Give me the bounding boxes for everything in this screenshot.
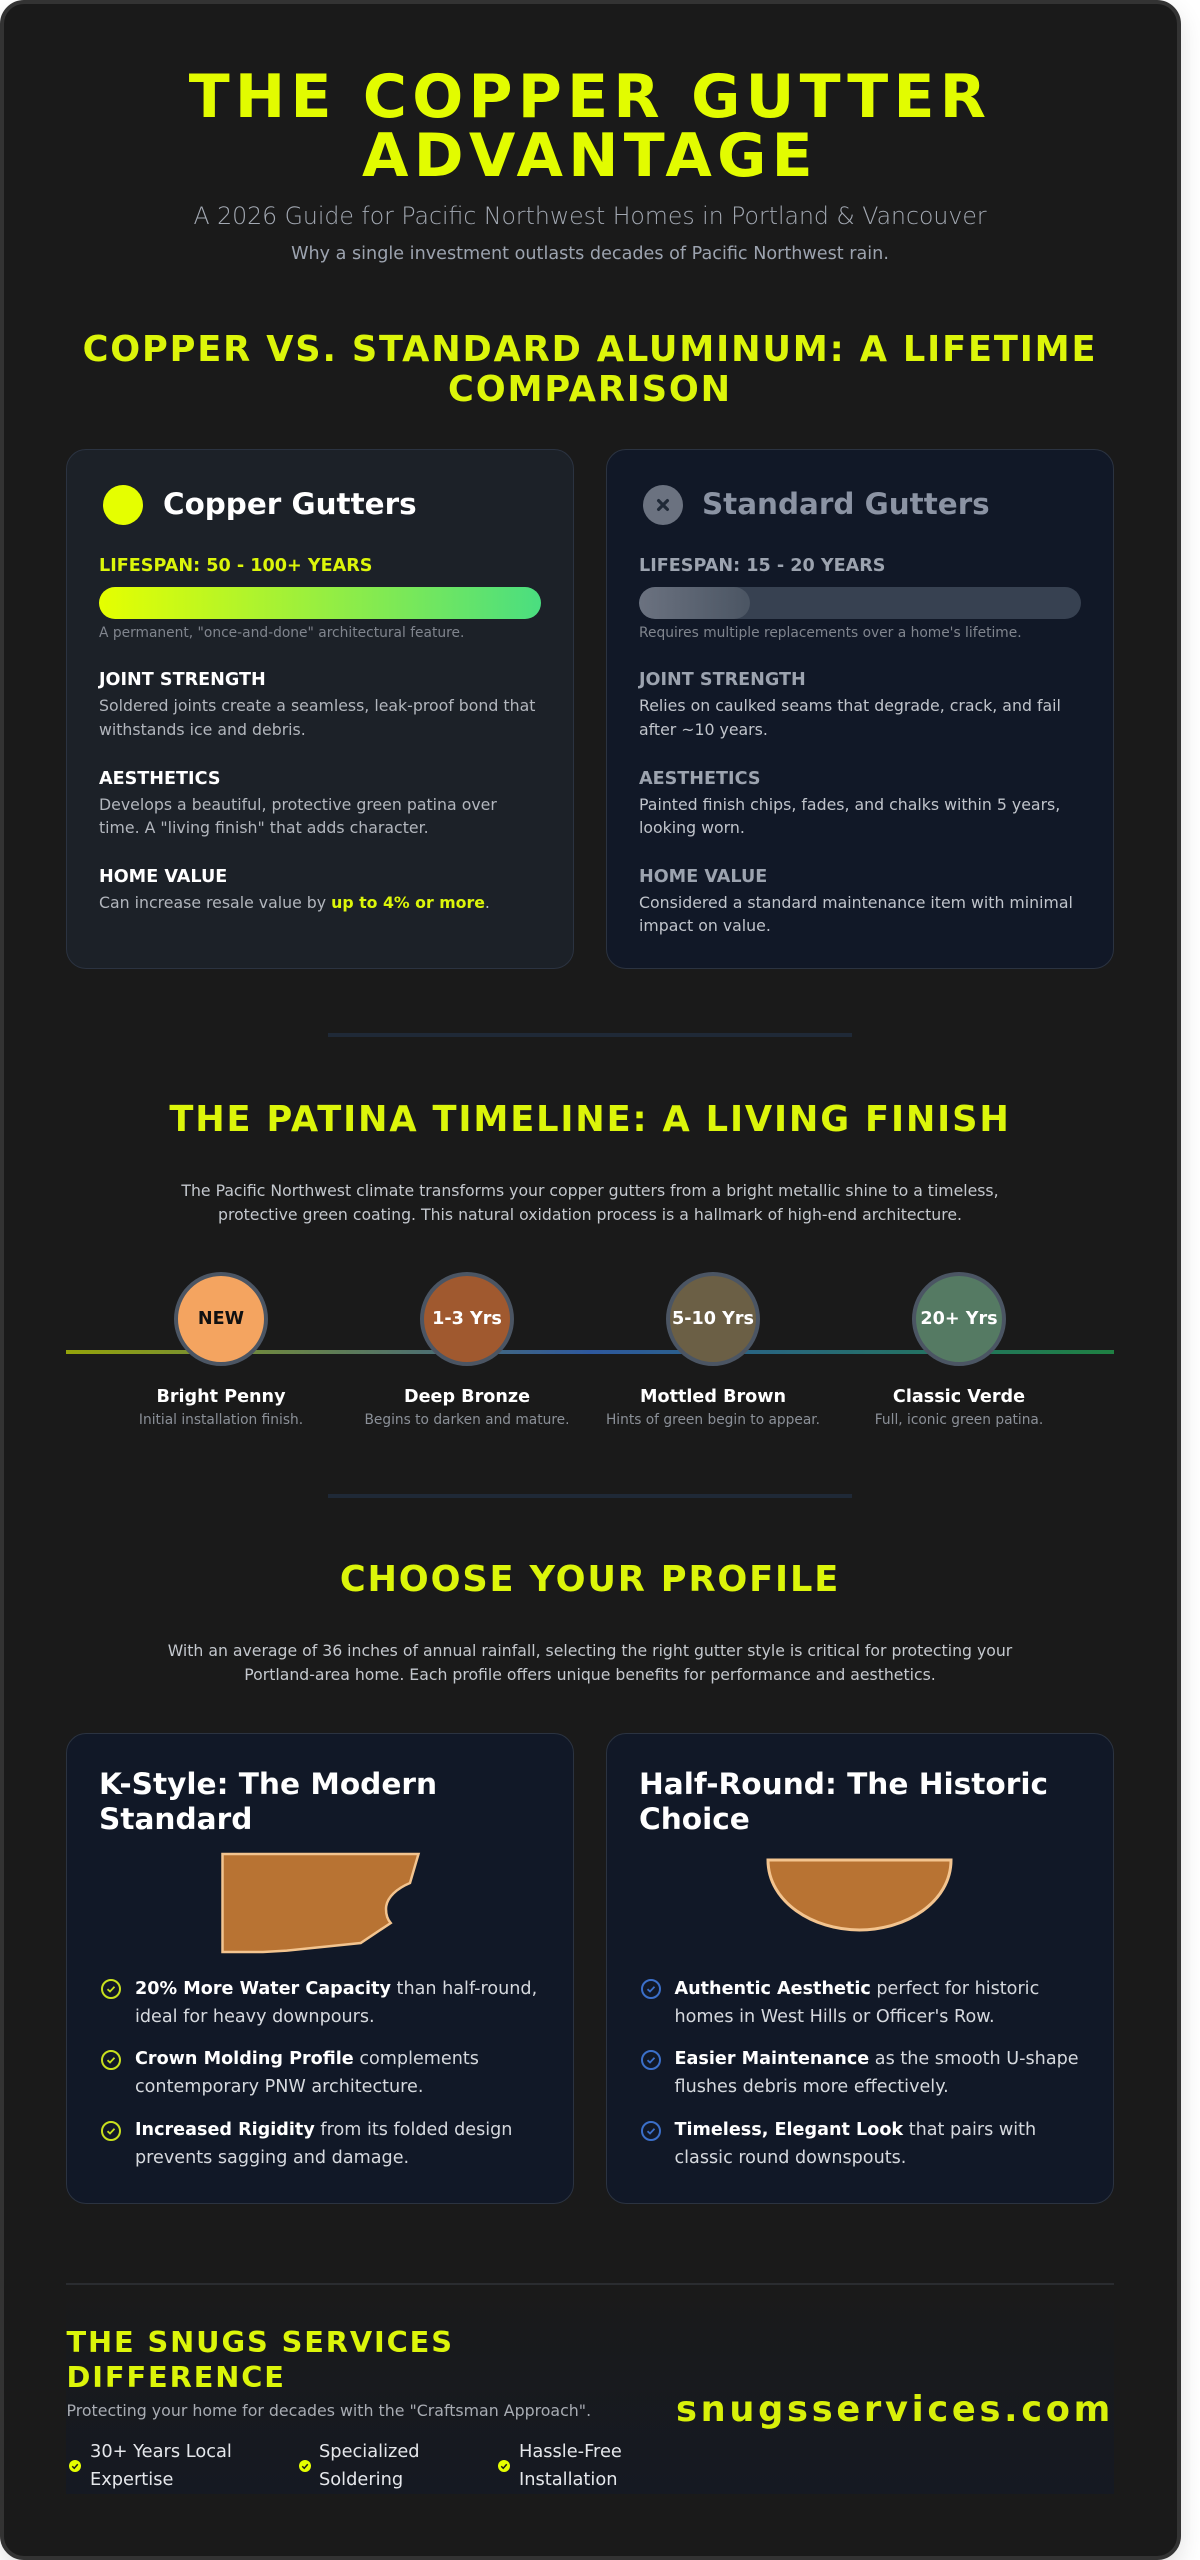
stage label: deep bronze: Deep Bronze: [404, 1387, 530, 1407]
feature: aesthetics: Painted finish chips, fades, and chalks within 5 years,: [639, 794, 1060, 814]
feature: home value: HOME VALUE: [639, 866, 767, 886]
patina intro text: protective green coating. This natural oxidation process is a hallmark of high-end architecture.: [218, 1205, 962, 1224]
benefit text: homes in West Hills or Officer's Row.: [674, 2007, 995, 2027]
benefit text: classic round downspouts.: [674, 2148, 906, 2168]
feature: expertise: [66, 2438, 266, 2494]
stage label: bright penny: [139, 1387, 303, 1428]
card heading: [639, 1767, 1048, 1836]
feature: soldering: [296, 2438, 466, 2494]
benefit: crown molding: [101, 2049, 479, 2097]
benefit text: flushes debris more effectively.: [674, 2077, 949, 2097]
benefit: water capacity: [101, 1978, 537, 2027]
footer website: snugsservices.com: [676, 2389, 1114, 2430]
feature: aesthetics: AESTHETICS: [639, 768, 761, 788]
title: THE COPPER GUTTER: [189, 62, 991, 132]
feature: home value: [99, 866, 490, 912]
stage label: mottled brown: [606, 1387, 820, 1428]
lifespan label: LIFESPAN: 15 - 20 YEARS: [639, 556, 885, 576]
benefit text: Easier Maintenance as the smooth U-shape: [674, 2049, 1079, 2069]
benefit: rigidity: [101, 2120, 512, 2168]
heading: comparison: [83, 329, 1097, 410]
profile intro text: [168, 1640, 1012, 1684]
icon: copper circle: [103, 485, 143, 525]
stage marker: 20+ years: [912, 1272, 1006, 1366]
footer band: [66, 2283, 1114, 2494]
feature text: [519, 2438, 622, 2493]
panel: half-round profile: [606, 1733, 1114, 2204]
feature: joint strength: [638, 670, 1061, 739]
feature: joint strength: Relies on caulked seams that degrade, crack, and fail: [639, 696, 1061, 715]
icon: k-style gutter shape: [221, 1852, 420, 1954]
benefit text: [674, 1978, 1039, 2027]
patina intro text: The Pacific Northwest climate transforms your copper gutters from a bright metallic shine to a timeless,: [181, 1181, 999, 1200]
feature text: [319, 2438, 420, 2493]
benefit text: [135, 1978, 537, 2027]
icon: check: [101, 2050, 121, 2070]
icon: check: [641, 2050, 661, 2070]
icon: check dot: [299, 2460, 311, 2472]
benefit text: [135, 2120, 512, 2168]
feature text: [90, 2438, 232, 2493]
panel: standard gutters: [606, 449, 1114, 969]
card heading: Copper Gutters: [163, 487, 417, 521]
stage marker: 1-3 years: 1-3 Yrs: [432, 1309, 502, 1329]
heading: patina timeline: THE PATINA TIMELINE: A LIVING FINISH: [169, 1099, 1011, 1140]
heading: comparison: COPPER VS. STANDARD ALUMINUM: A LIFETIME: [83, 329, 1097, 370]
bar fill: [639, 587, 750, 619]
benefit: authentic aesthetic: [641, 1978, 1039, 2027]
lifespan bar: [639, 587, 1081, 619]
stage label: mottled brown: Hints of green begin to appear.: [606, 1412, 820, 1428]
feature: joint strength: JOINT STRENGTH: [639, 670, 806, 690]
timeline: [66, 1350, 1114, 1354]
card heading: [99, 1767, 437, 1836]
timeline line: [66, 1350, 1114, 1354]
panel: k-style profile: [66, 1733, 574, 2204]
lifespan note: Requires multiple replacements over a home's lifetime.: [639, 625, 1022, 641]
feature: installation: [495, 2438, 665, 2494]
card heading: Standard: [99, 1802, 252, 1836]
feature: aesthetics: looking worn.: [639, 818, 745, 837]
feature: home value: Can increase resale value by up to 4% or more.: [99, 892, 490, 912]
icon: x circle: [643, 485, 683, 525]
stage label: mottled brown: Mottled Brown: [640, 1387, 786, 1407]
stage marker: 20+ years: 20+ Yrs: [920, 1309, 998, 1329]
stage marker: new: NEW: [198, 1309, 244, 1329]
feature: aesthetics: [99, 768, 497, 837]
card heading: Half-Round: The Historic: [639, 1767, 1048, 1801]
icon: check dot: [69, 2460, 81, 2472]
feature: aesthetics: AESTHETICS: [99, 768, 221, 788]
stage marker: 5-10 years: 5-10 Yrs: [672, 1309, 754, 1329]
feature: aesthetics: Develops a beautiful, protective green patina over: [99, 794, 497, 814]
benefit text: Increased Rigidity from its folded design: [135, 2120, 512, 2140]
benefit text: [674, 2120, 1036, 2168]
profile intro text: Portland-area home. Each profile offers unique benefits for performance and aesthetics.: [244, 1664, 936, 1684]
feature: joint strength: JOINT STRENGTH: [99, 670, 266, 690]
icon: check: [101, 2121, 121, 2141]
feature: home value: HOME VALUE: [99, 866, 227, 886]
benefit: timeless look: [641, 2120, 1036, 2168]
benefit text: ideal for heavy downpours.: [135, 2007, 375, 2027]
feature text: Specialized: [319, 2441, 420, 2462]
stage label: deep bronze: [364, 1387, 570, 1428]
feature text: Expertise: [90, 2468, 173, 2490]
profile intro text: With an average of 36 inches of annual rainfall, selecting the right gutter style is critical for protecting your: [168, 1640, 1012, 1660]
lifespan bar: [99, 587, 541, 619]
panel: copper gutters: [66, 449, 574, 969]
heading: comparison: COMPARISON: [448, 369, 732, 410]
benefit text: [135, 2049, 479, 2097]
stage label: classic verde: Full, iconic green patina.: [875, 1412, 1043, 1428]
card heading: Standard Gutters: [702, 487, 990, 521]
benefit text: Crown Molding Profile complements: [135, 2049, 479, 2069]
benefit text: contemporary PNW architecture.: [135, 2077, 423, 2097]
feature: home value: impact on value.: [639, 916, 771, 935]
footer heading: THE SNUGS SERVICES: [66, 2325, 454, 2359]
stage label: deep bronze: Begins to darken and mature.: [364, 1412, 570, 1428]
benefit: easier maintenance: [641, 2049, 1079, 2097]
stage label: bright penny: Bright Penny: [156, 1387, 286, 1407]
icon: half-round gutter shape: [766, 1858, 952, 1932]
card heading: K-Style: The Modern: [99, 1767, 437, 1801]
benefit text: 20% More Water Capacity than half-round,: [135, 1978, 537, 1998]
patina intro text: [181, 1181, 999, 1224]
feature text: 30+ Years Local: [90, 2441, 232, 2462]
footer tagline: Protecting your home for decades with the "Craftsman Approach".: [66, 2401, 591, 2420]
feature: joint strength: Soldered joints create a seamless, leak-proof bond that: [99, 696, 535, 715]
icon: check: [641, 2121, 661, 2141]
icon: check: [641, 1979, 661, 1999]
benefit text: prevents sagging and damage.: [135, 2148, 409, 2168]
icon: check: [101, 1979, 121, 1999]
feature text: Installation: [519, 2468, 617, 2490]
stage label: bright penny: Initial installation finish.: [139, 1412, 303, 1428]
footer heading: [66, 2325, 454, 2394]
feature: home value: Considered a standard maintenance item with minimal: [639, 892, 1073, 912]
feature: home value: [639, 866, 1073, 935]
feature: joint strength: [98, 670, 536, 739]
feature text: Soldering: [319, 2468, 403, 2490]
feature: joint strength: after ~10 years.: [639, 720, 768, 739]
tagline: Why a single investment outlasts decades of Pacific Northwest rain.: [291, 244, 889, 264]
feature text: Hassle-Free: [519, 2441, 622, 2462]
lifespan note: A permanent, "once-and-done" architectural feature.: [99, 625, 464, 641]
benefit text: Timeless, Elegant Look that pairs with: [674, 2120, 1036, 2140]
stage label: classic verde: [875, 1387, 1043, 1428]
title: ADVANTAGE: [362, 121, 818, 191]
footer heading: DIFFERENCE: [66, 2360, 286, 2394]
feature: aesthetics: time. A "living finish" that adds character.: [99, 818, 429, 837]
stage marker: 5-10 years: [666, 1272, 760, 1366]
lifespan label: LIFESPAN: 50 - 100+ YEARS: [99, 556, 372, 576]
icon: check dot: [498, 2460, 510, 2472]
benefit text: [674, 2049, 1079, 2097]
feature: joint strength: withstands ice and debris.: [99, 720, 306, 739]
feature: aesthetics: [639, 768, 1060, 837]
stage marker: new: [174, 1272, 268, 1366]
subtitle: A 2026 Guide for Pacific Northwest Homes in Portland & Vancouver: [193, 202, 987, 230]
card heading: Choice: [639, 1802, 750, 1836]
stage label: classic verde: Classic Verde: [893, 1387, 1025, 1407]
heading: choose your profile: CHOOSE YOUR PROFILE: [340, 1559, 840, 1600]
stage marker: 1-3 years: [420, 1272, 514, 1366]
benefit text: Authentic Aesthetic perfect for historic: [674, 1978, 1039, 1998]
title: [189, 62, 991, 191]
